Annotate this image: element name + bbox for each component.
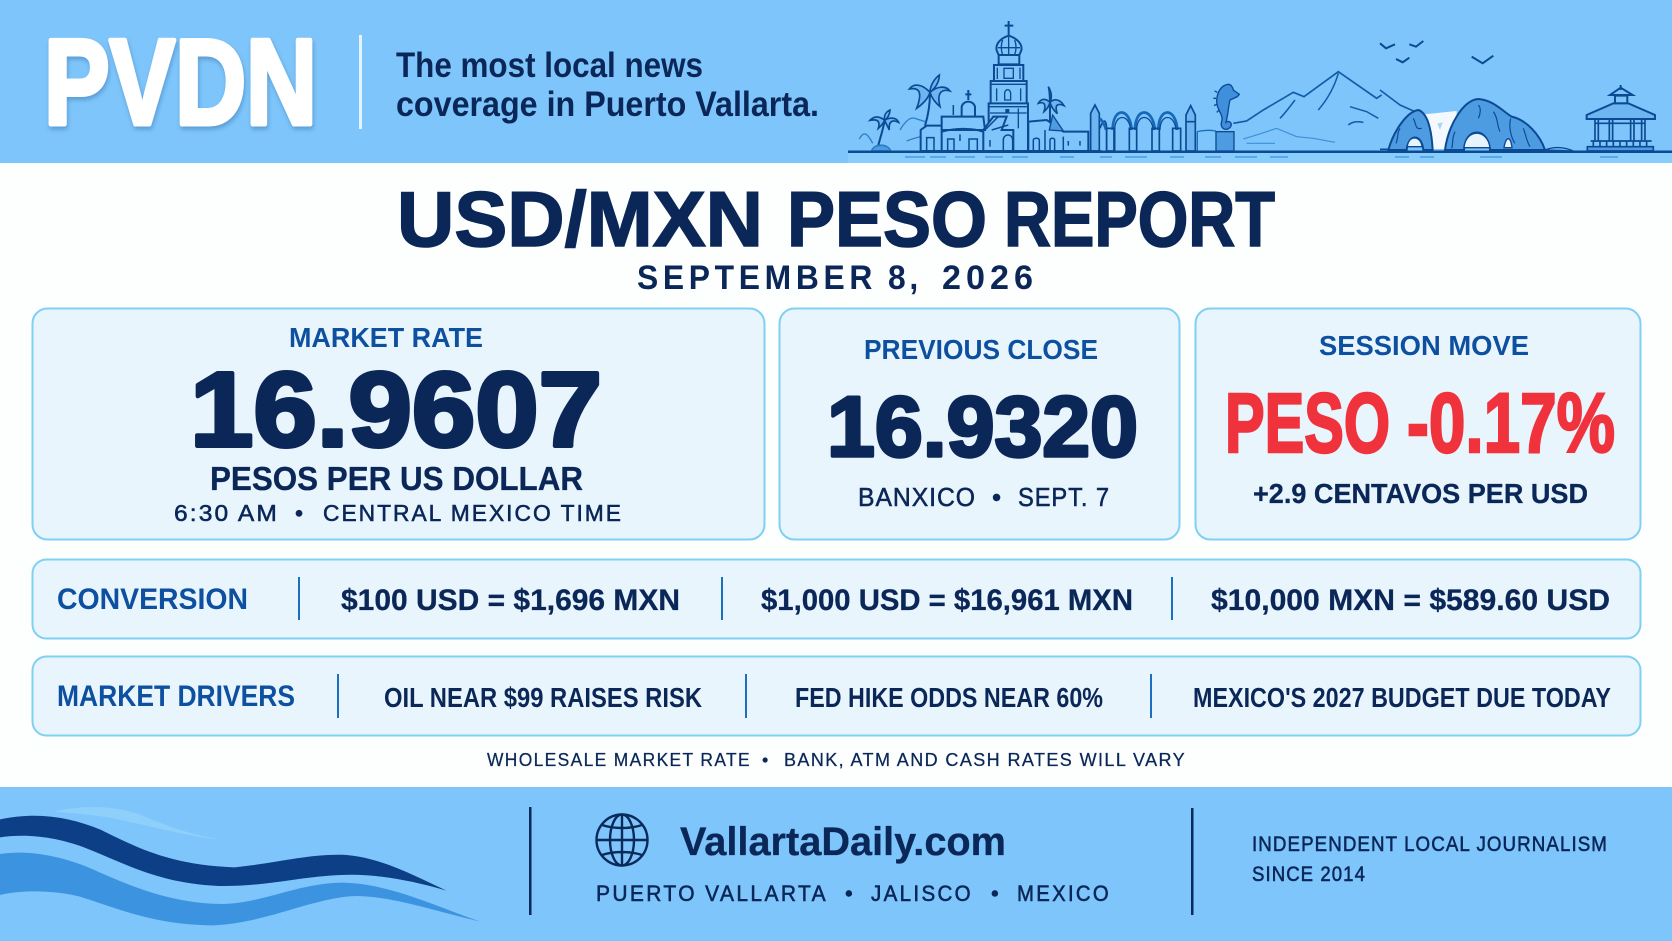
independent journalism text (1252, 833, 1608, 886)
website: VallartaDaily.com (680, 820, 1006, 864)
location: • (845, 881, 853, 906)
seahorse (1216, 132, 1234, 151)
date: SEPTEMBER (637, 259, 877, 297)
malecon arches and seahorse (1100, 72, 1382, 151)
tower (989, 21, 1028, 151)
logo: PVDN: PVDN (44, 14, 317, 150)
panel: session move: -0.17% (1407, 376, 1615, 470)
panel: market drivers: MARKET DRIVERS (57, 680, 295, 713)
panel: market rate: MARKET RATE (289, 322, 483, 353)
panel: conversion: $1,000 USD = $16,961 MXN (761, 584, 1133, 617)
skyline illustration (848, 21, 1672, 163)
panel: conversion: CONVERSION (57, 583, 248, 616)
location: PUERTO VALLARTA (596, 881, 828, 906)
panel: market rate: 16.9607 (190, 351, 602, 469)
footer divider 1 (529, 807, 532, 915)
location (596, 881, 1111, 906)
location: MEXICO (1017, 881, 1111, 906)
panel: session move (1196, 308, 1640, 540)
panel: market drivers: OIL NEAR $99 RAISES RISK (384, 682, 702, 713)
disclaimer note: BANK, ATM AND CASH RATES WILL VARY (784, 750, 1186, 770)
panel: previous close: PREVIOUS CLOSE (864, 334, 1098, 365)
panel: conversion: $100 USD = $1,696 MXN (341, 584, 680, 617)
title: PESO (787, 175, 987, 263)
panel: session move: PESO (1225, 376, 1390, 470)
date: 2026 (942, 259, 1038, 297)
icon: globe (596, 814, 648, 866)
chapel and buildings (921, 90, 1088, 151)
panel: previous close: SEPT. 7 (1018, 482, 1110, 512)
header band (0, 0, 1672, 163)
church and town (859, 21, 1114, 151)
rocks, birds and gazebo (1380, 41, 1655, 151)
title: USD/MXN (397, 175, 763, 263)
tagline: The most local news (396, 46, 703, 85)
panel: previous close (780, 308, 1180, 540)
panel: previous close: BANXICO (858, 482, 976, 512)
ground line (848, 150, 1672, 153)
left obelisk (1091, 105, 1099, 151)
footer band (0, 787, 1672, 941)
panel: session move: +2.9 CENTAVOS PER USD (1253, 478, 1588, 509)
independent journalism text: INDEPENDENT LOCAL JOURNALISM (1252, 833, 1608, 856)
panel: market drivers: FED HIKE ODDS NEAR 60% (795, 682, 1103, 713)
panel: conversion: $10,000 MXN = $589.60 USD (1211, 584, 1610, 617)
title (397, 175, 1275, 263)
location: JALISCO (871, 881, 973, 906)
panel: previous close: 16.9320 (827, 380, 1138, 475)
date (637, 259, 1038, 297)
palms (878, 92, 1050, 145)
tagline: coverage in Puerto Vallarta. (396, 85, 819, 124)
date: 8, (888, 259, 922, 297)
panel: market rate: PESOS PER US DOLLAR (210, 460, 583, 497)
panel: session move: SESSION MOVE (1319, 330, 1529, 361)
title: REPORT (1004, 175, 1275, 263)
gazebo (1610, 85, 1633, 103)
panel: conversion (32, 560, 1640, 638)
panel: market rate (32, 308, 764, 540)
disclaimer note: WHOLESALE MARKET RATE (487, 750, 751, 770)
panel: previous close: • (992, 482, 1001, 512)
panel: market rate: 6:30 AM (174, 500, 279, 526)
panel: market rate: CENTRAL MEXICO TIME (323, 500, 623, 526)
panel: market rate: • (295, 500, 303, 526)
location: • (991, 881, 999, 906)
disclaimer note (487, 750, 1186, 770)
panel: market drivers (32, 656, 1640, 736)
mountains (1233, 72, 1382, 123)
birds (1380, 41, 1493, 63)
independent journalism text: SINCE 2014 (1252, 863, 1366, 886)
footer divider 2 (1191, 808, 1194, 915)
tagline (359, 35, 819, 129)
wave graphic (0, 807, 480, 925)
disclaimer note: • (762, 750, 768, 770)
